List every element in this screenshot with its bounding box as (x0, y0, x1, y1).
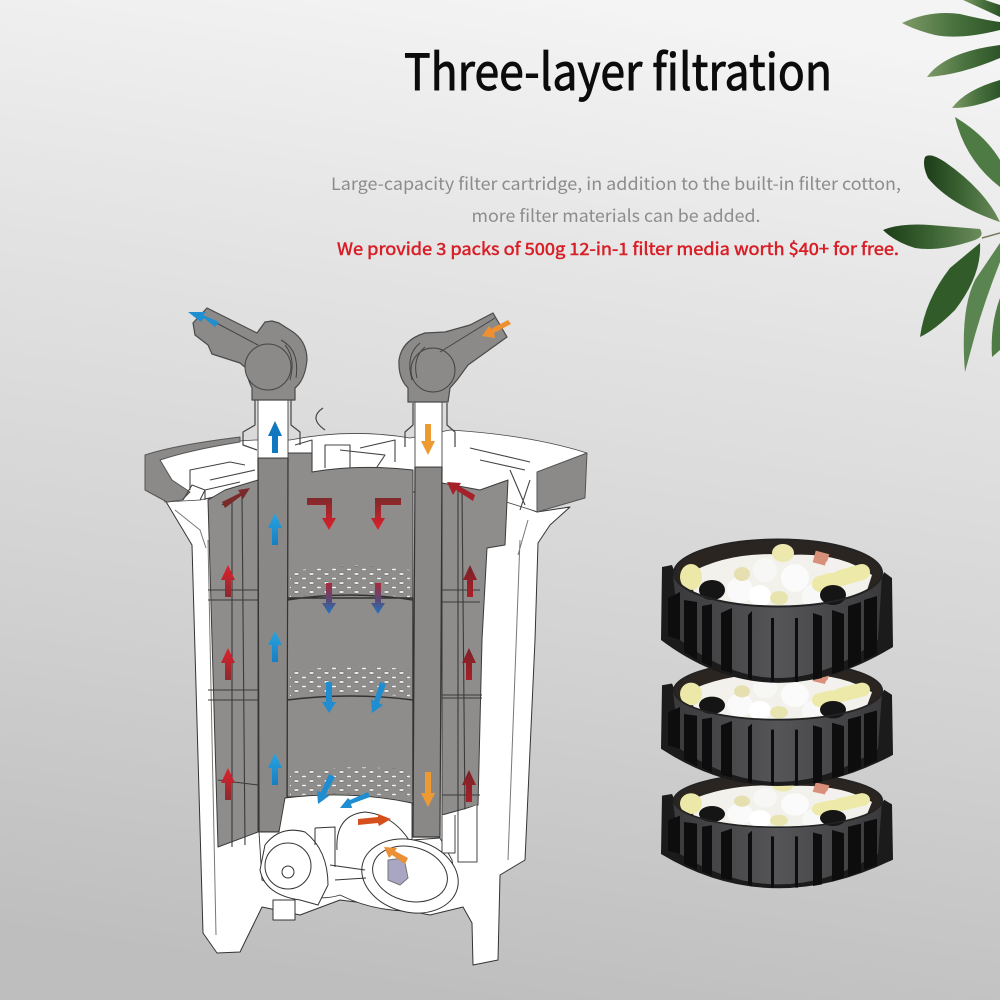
pipe joining chambers (330, 865, 366, 880)
description text: more filter materials can be added. (472, 202, 760, 227)
arrow: bottom orange red (358, 814, 391, 826)
arrow: bottom orange curve (384, 847, 408, 864)
top tray (661, 539, 893, 683)
arrow: third plate left (317, 774, 335, 804)
middle tray (661, 661, 893, 786)
arrow: pipe up blue 3 (268, 753, 282, 785)
inner tank blob (315, 812, 412, 867)
right neck (415, 402, 442, 467)
promo offer line: We provide 3 packs of 500g 12-in-1 filter media worth $40+ for free. (337, 235, 899, 260)
right elbow (399, 313, 507, 402)
arrow: pipe up blue 1 (268, 513, 282, 545)
arrow: third plate right (340, 792, 370, 808)
arrow: pipe down orange (421, 772, 435, 807)
bottom tray (661, 773, 893, 888)
arrow: right chamber dark red 2 (462, 648, 476, 680)
left pipe (258, 458, 288, 832)
perforated plates (290, 565, 410, 798)
arrow: top corner left (222, 488, 250, 508)
left elbow ball (207, 318, 297, 390)
description text: Large-capacity filter cartridge, in addition to the built-in filter cotton, (331, 170, 901, 195)
lid white top (150, 430, 587, 512)
arrow: plate down right (371, 583, 385, 614)
right pipe (413, 467, 442, 837)
right lower columns (442, 805, 477, 862)
arrow: second plate left (322, 682, 336, 713)
side compartment lines (208, 490, 482, 847)
filter canister diagram (145, 308, 587, 965)
title: Three-layer filtration (404, 33, 832, 105)
inner wall line (175, 510, 528, 935)
left impeller (260, 830, 328, 920)
arrow: inlet orange (482, 320, 511, 338)
arrow: pipe up blue 2 (268, 631, 282, 662)
bottom white section (259, 795, 455, 911)
shelf lines (287, 595, 413, 800)
lid details (183, 440, 530, 510)
leaves decoration (883, 0, 1000, 372)
arrow: neck up blue (268, 421, 282, 453)
flow arrows (188, 312, 511, 864)
cartridge stack (661, 539, 893, 888)
grey inner chamber (208, 480, 508, 847)
left neck (258, 398, 288, 458)
arrow: neck down orange (421, 424, 435, 455)
arrow: top corner right (447, 482, 475, 501)
grey central chamber (287, 453, 413, 805)
left rim grey lid (145, 437, 240, 502)
right rim grey lid (537, 453, 587, 512)
arrow: red elbow right (371, 498, 401, 530)
neck collars (243, 400, 455, 450)
arrow: second plate right (371, 682, 386, 713)
arrow: right chamber dark red 1 (463, 565, 477, 597)
arrow: red elbow left (307, 498, 336, 530)
arrow: plate down left (322, 583, 336, 614)
arrow: outlet blue (188, 312, 219, 327)
arrow: left chamber red 1 (221, 565, 235, 597)
arrow: right chamber dark red 3 (462, 770, 476, 802)
arrow: left chamber red 3 (221, 768, 235, 800)
arrow: left chamber red 2 (221, 648, 235, 680)
left elbow (193, 308, 307, 400)
description text (331, 170, 901, 227)
right elbow ball (410, 318, 495, 392)
canister white outer body (165, 490, 570, 965)
right oval chamber (353, 829, 467, 923)
